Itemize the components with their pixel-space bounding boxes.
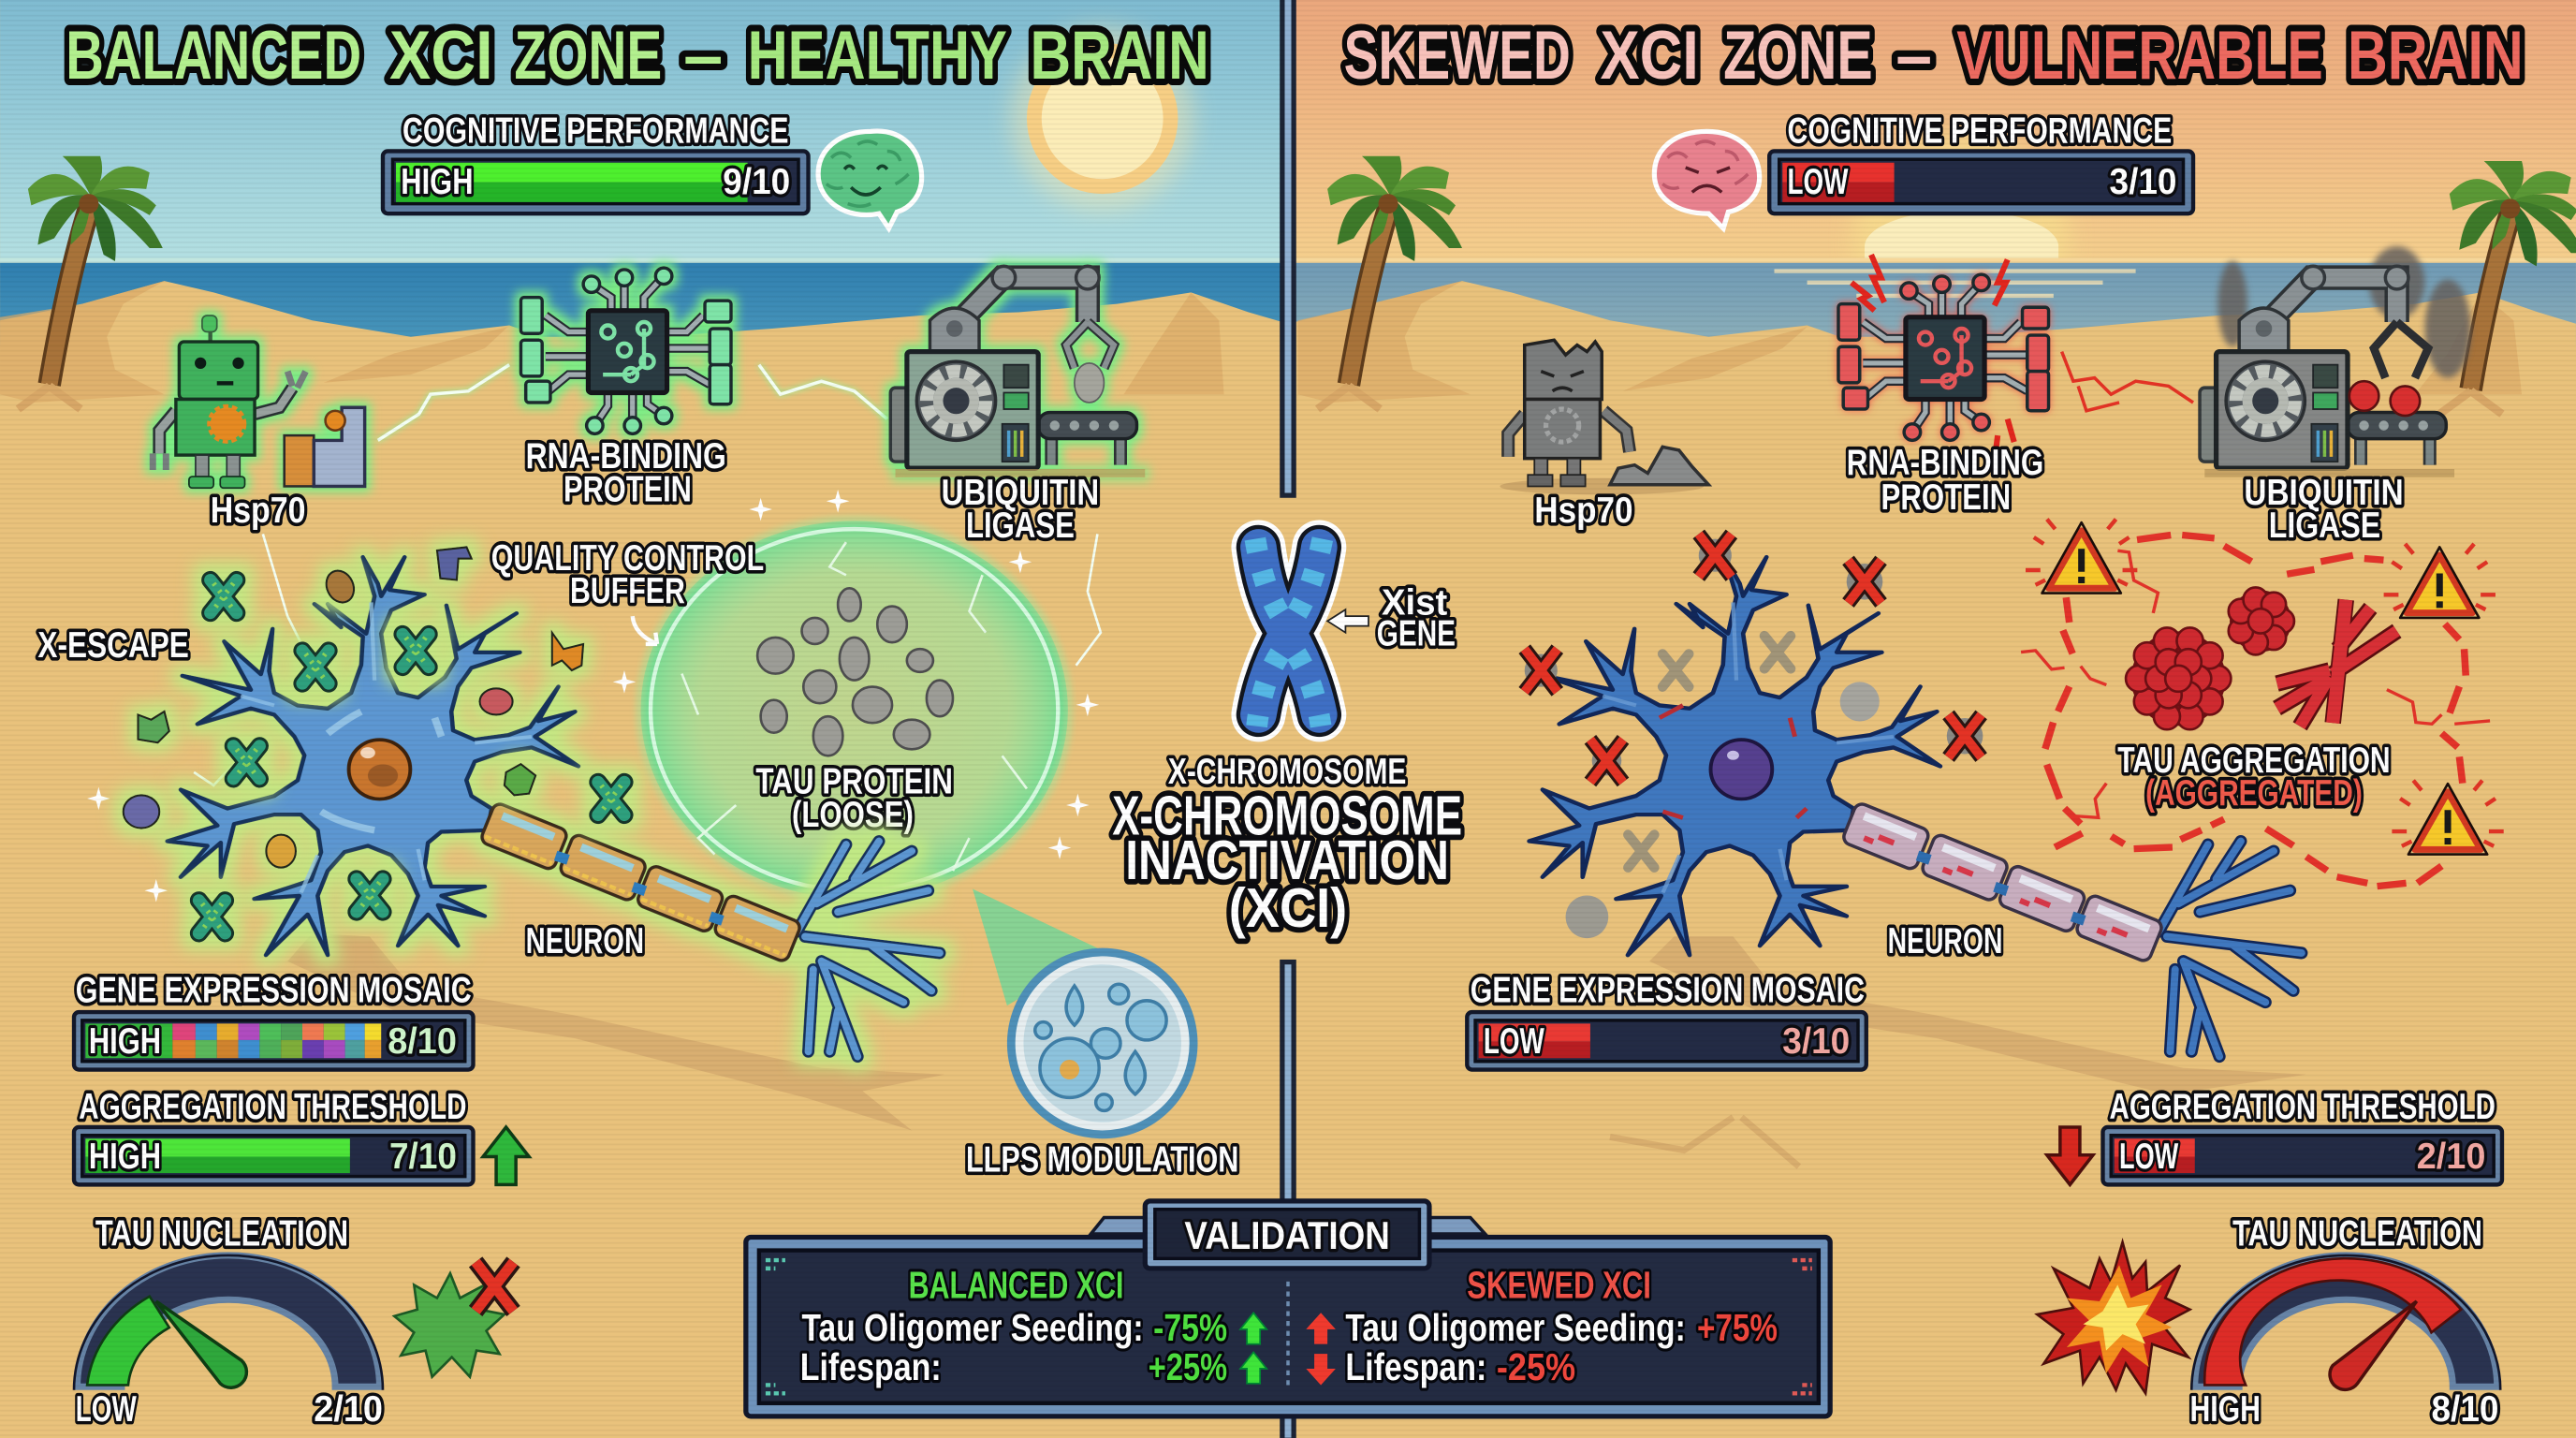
title left: BALANCED	[66, 16, 361, 94]
label: quality control buffer: BUFFER	[570, 571, 685, 611]
title right: SKEWED	[1344, 16, 1571, 94]
label: Hsp70 left: Hsp70	[211, 491, 305, 531]
big aggregate	[2126, 627, 2231, 729]
label: tau aggregation: (AGGREGATED)	[2145, 773, 2363, 814]
arrow: threshold down	[2047, 1127, 2093, 1184]
title right: BRAIN	[2348, 16, 2524, 94]
icon: explosion	[2037, 1242, 2190, 1393]
label: Xist gene	[1377, 582, 1456, 654]
label: RNA-binding protein right	[1847, 443, 2043, 518]
central divider middle	[1280, 960, 1296, 1247]
palm tree right b	[2439, 161, 2576, 414]
label: tau aggregation: TAU AGGREGATION	[2117, 741, 2391, 781]
tau nucleation gauge left: LOW	[76, 1389, 137, 1430]
aggregation threshold right: 2/10	[2417, 1137, 2485, 1177]
center title: INACTIVATION	[1125, 829, 1449, 891]
balanced column: +25%	[1149, 1345, 1227, 1388]
label: ubiquitin ligase left: UBIQUITIN	[942, 473, 1099, 513]
gene expression mosaic right: GENE EXPRESSION MOSAIC	[1471, 971, 1865, 1011]
balanced column: -75%	[1153, 1306, 1227, 1349]
skewed column: -25%	[1497, 1345, 1575, 1388]
neuron shadow left	[287, 933, 944, 1130]
cognitive performance left: 9/10	[723, 162, 790, 202]
center title: (XCI)	[1229, 876, 1347, 939]
small aggregate	[2229, 587, 2294, 654]
icon: Hsp70 robot	[153, 315, 365, 488]
neuron shadow right	[1649, 936, 2306, 1094]
tau aggregation zone	[2021, 520, 2504, 887]
cognitive performance left	[383, 111, 809, 213]
bubble lightning	[194, 534, 1101, 785]
label: RNA-binding protein left: RNA-BINDING	[526, 436, 726, 477]
fibrils	[2277, 600, 2397, 726]
lightning left	[378, 365, 887, 440]
balanced column: Tau Oligomer Seeding:	[802, 1306, 1144, 1349]
cognitive performance right: COGNITIVE PERFORMANCE	[1788, 111, 2172, 152]
validation tab	[1145, 1201, 1429, 1269]
palm tree left	[18, 156, 163, 409]
skewed column	[1306, 1263, 1778, 1388]
arrow: threshold up	[483, 1127, 529, 1184]
tau nucleation gauge right: 8/10	[2431, 1389, 2498, 1430]
label: neuron left: NEURON	[526, 921, 644, 961]
label: quality control buffer: QUALITY CONTROL	[491, 538, 764, 579]
icon: inhibited tau seed	[394, 1262, 514, 1377]
label: RNA-binding protein right: RNA-BINDING	[1847, 443, 2043, 483]
aggregation threshold left: HIGH	[89, 1137, 161, 1177]
label: X-escape: X-ESCAPE	[37, 625, 189, 666]
palm tree right a	[1318, 156, 1462, 409]
label: RNA-binding protein left	[526, 436, 726, 509]
arrow: buffer pointer	[633, 616, 657, 644]
corner pixels	[766, 1260, 785, 1393]
neuron left	[168, 557, 940, 1056]
aggregation threshold left	[74, 1087, 474, 1184]
title left: HEALTHY	[748, 16, 1007, 94]
tau nucleation gauge left: TAU NUCLEATION	[95, 1213, 348, 1254]
red lightning	[2062, 352, 2193, 411]
label: ubiquitin ligase right: LIGASE	[2269, 506, 2380, 546]
sun	[1010, 26, 1194, 211]
label: tau aggregation	[2117, 741, 2391, 814]
label: ubiquitin ligase right	[2244, 473, 2404, 546]
background: right beach scene	[1288, 0, 2576, 1438]
skewed column: Lifespan:	[1345, 1345, 1486, 1388]
icon: happy brain	[818, 131, 922, 228]
aggregation threshold left: AGGREGATION THRESHOLD	[79, 1087, 466, 1127]
skewed column: +75%	[1697, 1306, 1778, 1349]
icon: LLPS droplets	[1007, 948, 1197, 1138]
gene expression mosaic right: 3/10	[1782, 1021, 1850, 1062]
sunset sun	[1853, 131, 2070, 348]
axon and terminal	[797, 842, 940, 1056]
divider highlights	[1286, 0, 1290, 1438]
title right: ZONE	[1723, 16, 1873, 94]
tau nucleation gauge left: 2/10	[314, 1389, 383, 1430]
neuron right	[1525, 534, 2302, 1056]
icon: smoking ubiquitin ligase	[2200, 246, 2471, 473]
tau nucleation gauge right: HIGH	[2190, 1389, 2261, 1430]
icon: RNA-binding protein right	[1838, 255, 2049, 462]
tau nucleation gauge right: TAU NUCLEATION	[2232, 1213, 2482, 1254]
gene expression mosaic right: LOW	[1484, 1021, 1544, 1062]
label: ubiquitin ligase right: UBIQUITIN	[2244, 473, 2404, 513]
title right	[1344, 16, 2524, 94]
gene expression mosaic left: 8/10	[388, 1021, 457, 1062]
tau protein blobs	[757, 588, 953, 756]
title left	[66, 16, 1209, 94]
faint sand marks	[1610, 1117, 1799, 1167]
label: quality control buffer	[491, 538, 764, 611]
skewed column: Tau Oligomer Seeding:	[1345, 1306, 1686, 1349]
label: ubiquitin ligase left: LIGASE	[966, 506, 1075, 546]
central divider bottom	[1280, 1410, 1296, 1438]
sparkles	[87, 490, 1099, 902]
label: Xist gene: Xist	[1382, 582, 1447, 623]
soma and dendrites	[168, 557, 578, 955]
title left: BRAIN	[1030, 16, 1209, 94]
failed X marks	[1525, 534, 1983, 938]
label: Xist gene: GENE	[1377, 614, 1456, 654]
label: neuron right: NEURON	[1888, 921, 2002, 961]
arrow: Xist	[1327, 609, 1368, 633]
label: RNA-binding protein left: PROTEIN	[564, 469, 692, 509]
X-escape chromosomes	[198, 580, 624, 933]
escaped proteins	[124, 547, 583, 868]
aggregation threshold left: 7/10	[389, 1137, 457, 1177]
cognitive performance right	[1769, 111, 2193, 213]
tau nucleation gauge right	[2190, 1213, 2500, 1430]
title left: ZONE	[514, 16, 662, 94]
cognitive performance left: COGNITIVE PERFORMANCE	[402, 111, 788, 152]
validation tab: VALIDATION	[1184, 1213, 1390, 1257]
gene expression mosaic left: GENE EXPRESSION MOSAIC	[76, 971, 472, 1011]
aggregation threshold right: LOW	[2119, 1137, 2179, 1177]
icon: ubiquitin ligase left	[890, 266, 1145, 473]
balanced column: BALANCED XCI	[909, 1263, 1123, 1306]
label: tau protein loose	[755, 762, 953, 835]
label: Hsp70 right: Hsp70	[1534, 491, 1633, 531]
icon: broken robot	[1500, 340, 1708, 494]
cone to LLPS	[973, 888, 1101, 1005]
label: ubiquitin ligase left	[942, 473, 1099, 546]
label: tau protein loose: TAU PROTEIN	[755, 762, 953, 802]
center title	[1112, 785, 1462, 939]
label: RNA-binding protein right: PROTEIN	[1881, 477, 2011, 518]
aggregation threshold right	[2102, 1087, 2502, 1184]
tau nucleation gauge left	[74, 1213, 383, 1430]
cognitive performance right: 3/10	[2110, 162, 2176, 202]
icon: sad brain	[1654, 131, 1760, 228]
title right: VULNERABLE	[1956, 16, 2323, 94]
center title: X-CHROMOSOME	[1112, 785, 1462, 847]
label: tau protein loose: (LOOSE)	[792, 795, 914, 835]
skewed column: SKEWED XCI	[1467, 1263, 1651, 1306]
title left: –	[683, 16, 723, 94]
title right: XCI	[1600, 16, 1699, 94]
label: x-chromosome: X-CHROMOSOME	[1168, 752, 1406, 792]
background: left beach scene	[0, 0, 1288, 1438]
label: LLPS modulation: LLPS MODULATION	[966, 1139, 1238, 1180]
title left: XCI	[389, 16, 493, 94]
quality control bubble	[636, 516, 1101, 1005]
central divider top	[1280, 0, 1296, 498]
balanced column: Lifespan:	[800, 1345, 942, 1388]
chromosome X	[1255, 539, 1323, 726]
title right: –	[1895, 16, 1932, 94]
gene expression mosaic left: HIGH	[89, 1021, 161, 1062]
balanced column	[800, 1263, 1266, 1388]
cognitive performance left: HIGH	[401, 162, 474, 202]
gene expression mosaic right	[1467, 971, 1866, 1070]
gene expression mosaic left	[74, 971, 474, 1070]
cognitive performance right: LOW	[1788, 162, 1849, 202]
validation panel	[746, 1201, 1830, 1416]
icon: RNA-binding protein left	[520, 268, 731, 433]
